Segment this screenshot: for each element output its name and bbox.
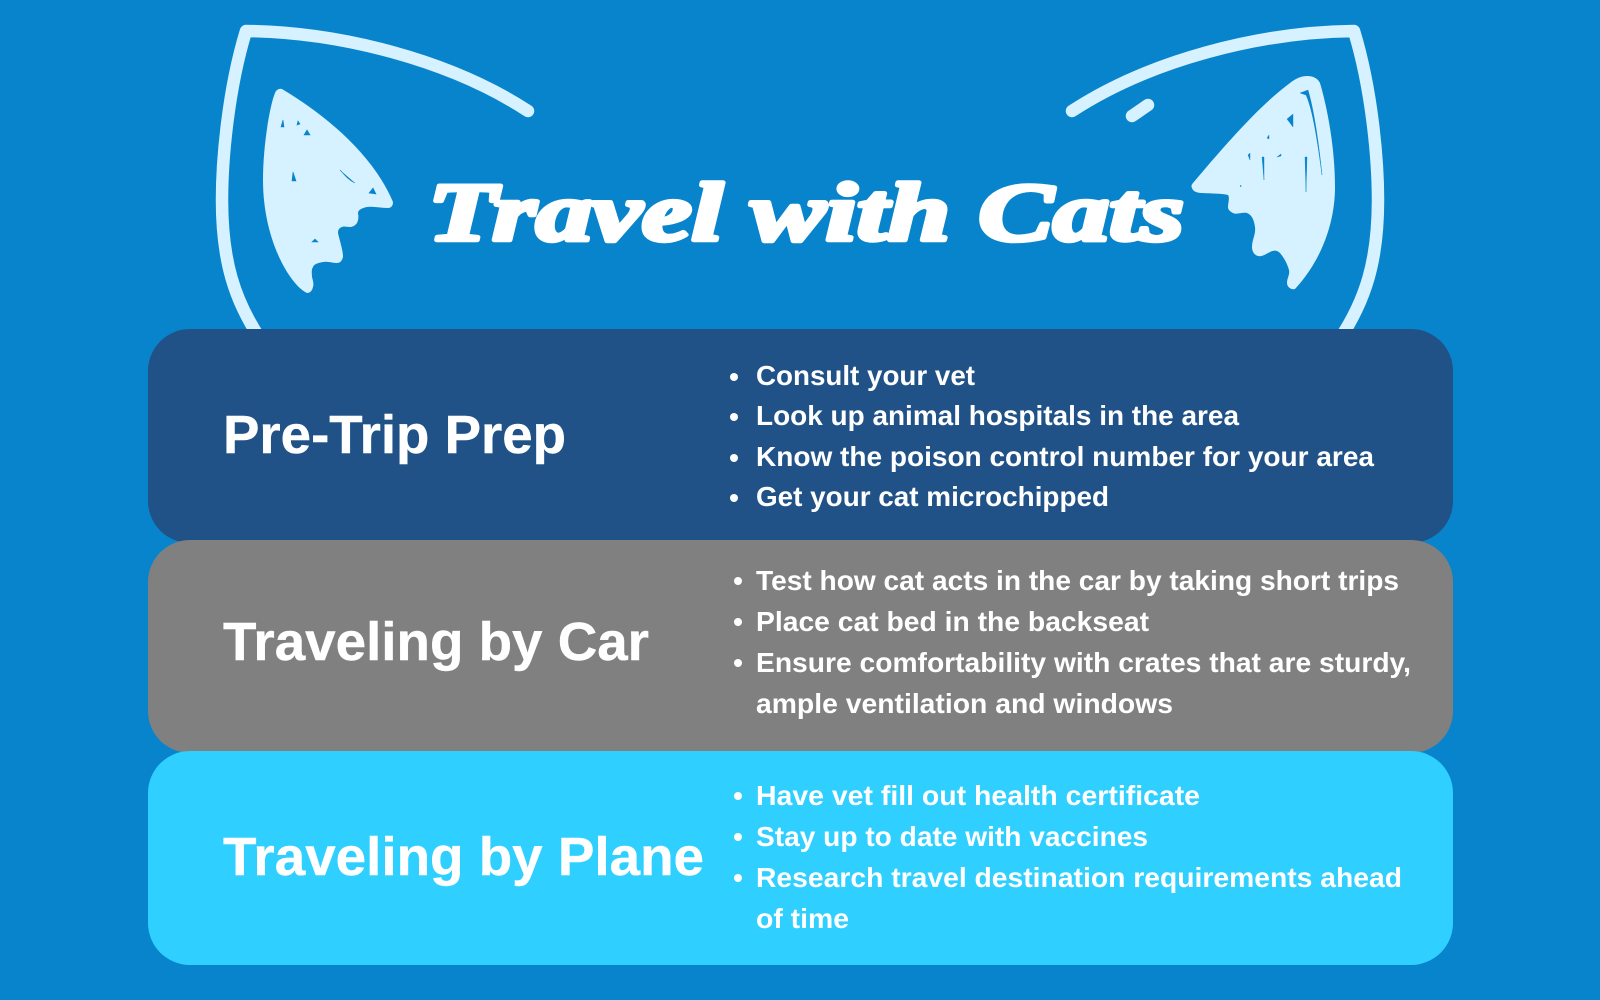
list: plane tips: Research travel destination requirements ahead — [756, 862, 1402, 893]
list: plane tips — [734, 780, 1402, 934]
icon: right inner ear — [1192, 76, 1335, 289]
list: plane tips: of time — [756, 903, 849, 934]
list: plane tips: Stay up to date with vaccines — [756, 821, 1148, 852]
list: pre-trip tips: Look up animal hospitals in the area — [756, 400, 1240, 431]
list: car tips: Test how cat acts in the car by taking short trips — [756, 565, 1399, 596]
panel: pre-trip prep — [148, 329, 1453, 543]
list: car tips: Place cat bed in the backseat — [756, 606, 1149, 637]
heading: traveling by car: Traveling by Car — [223, 612, 649, 672]
list: car tips: ample ventilation and windows — [756, 688, 1173, 719]
title: Travel with Cats — [428, 166, 1184, 258]
list: car tips — [734, 565, 1411, 719]
list: pre-trip tips: Consult your vet — [756, 360, 975, 391]
cat head outline: right ear — [1072, 31, 1378, 340]
heading: traveling by plane: Traveling by Plane — [223, 827, 704, 887]
panel: traveling by car — [148, 540, 1453, 753]
panel: traveling by plane — [148, 751, 1453, 965]
heading: pre-trip prep: Pre-Trip Prep — [223, 405, 566, 465]
list: pre-trip tips: Know the poison control number for your area — [756, 441, 1375, 472]
list: car tips: Ensure comfortability with crates that are sturdy, — [756, 647, 1411, 678]
list: pre-trip tips: Get your cat microchipped — [756, 481, 1109, 512]
list: pre-trip tips — [730, 360, 1375, 512]
cat head outline: left ear — [222, 31, 528, 340]
icon: left inner ear — [263, 89, 393, 293]
list: plane tips: Have vet fill out health certificate — [756, 780, 1200, 811]
